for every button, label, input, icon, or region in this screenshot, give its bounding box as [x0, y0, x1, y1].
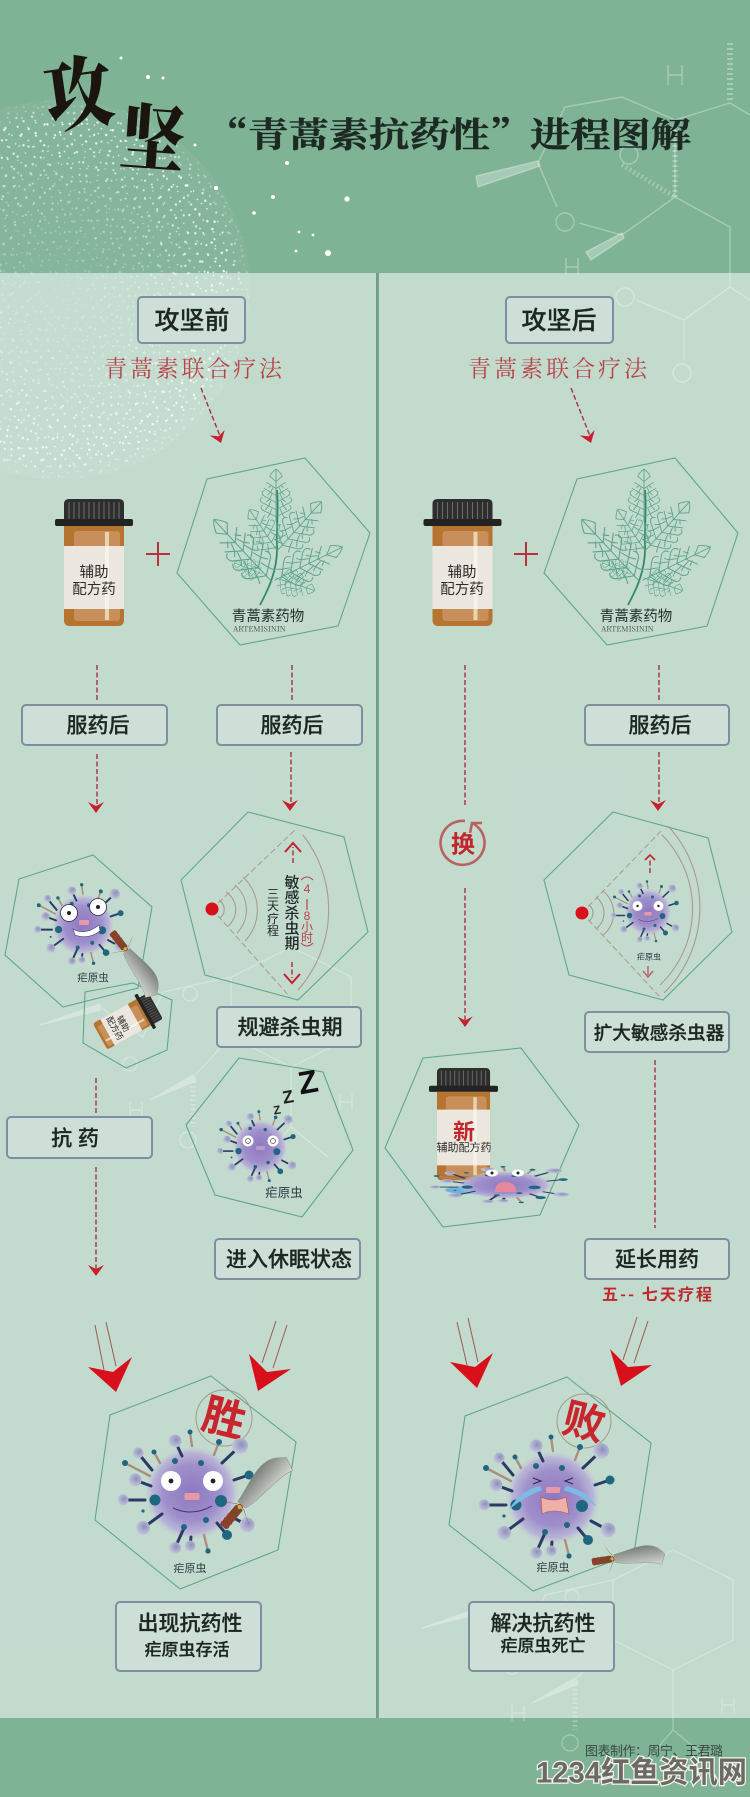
arrow: box to parasite col 1	[88, 754, 104, 813]
hexagon: dormant parasite: 疟原虫	[265, 1185, 303, 1200]
globe of dots	[0, 56, 350, 490]
icon: swap: 换	[451, 832, 475, 858]
footer credit: 图表制作：周宁、王君璐	[585, 1744, 723, 1758]
molecule watermarks	[40, 947, 734, 1762]
stamp: win: 胜	[197, 1391, 251, 1447]
box: dormancy: 进入休眠状态	[226, 1248, 352, 1272]
hexagon: grinning parasite: 疟原虫	[77, 971, 109, 984]
hexagon: enlarged radar: 疟原虫	[637, 952, 661, 962]
box: after taking right col: 服药后	[628, 714, 692, 738]
hexagon: parasite loses: 疟原虫	[536, 1560, 570, 1574]
box: extend	[585, 1239, 729, 1279]
hexagon: tilted bottle with knife: 辅助	[115, 1014, 132, 1034]
box: enlarge: 扩大敏感杀虫器	[594, 1022, 725, 1044]
hexagon: dormant parasite: Z	[295, 1063, 321, 1101]
hexagon: tilted bottle with knife	[83, 922, 172, 1068]
title: brush characters	[36, 28, 189, 189]
vertical text: hours: 48小时	[301, 882, 313, 945]
hexagon: dormant parasite: Z	[281, 1086, 295, 1108]
plus (after)	[514, 542, 538, 566]
icon: swap	[441, 821, 485, 865]
hexagon: new drug crushing parasite: 新	[453, 1120, 475, 1144]
hexagon: parasite loses	[449, 1377, 667, 1591]
heading: before: 攻坚前	[154, 307, 230, 335]
box: resistance solved: 疟原虫死亡	[500, 1636, 586, 1656]
box: extend: 延长用药	[615, 1248, 699, 1272]
divider	[376, 273, 378, 1718]
arrow: dash to swap	[464, 665, 466, 805]
box: after taking col 2	[217, 705, 362, 745]
hexagon: artemisinin plant (after)	[544, 458, 738, 645]
arrow: therapy to plant (before)	[201, 388, 229, 446]
hexagon: parasite wins	[95, 1376, 298, 1589]
box: after taking col 2: 服药后	[260, 714, 324, 738]
hexagon: new drug crushing parasite	[385, 1048, 579, 1227]
arrow: therapy to plant (after)	[571, 388, 599, 446]
arrows: bottom left panel	[88, 1321, 291, 1392]
box: after taking col 1	[22, 705, 167, 745]
vertical text: sensitive period: 敏感杀虫期	[284, 874, 300, 952]
hexagon: enlarged radar	[544, 812, 732, 1000]
box: resistance appears: 出现抗药性	[138, 1612, 242, 1636]
box: after taking right col	[585, 705, 729, 745]
arrow: dash to box right col	[658, 665, 660, 700]
bottle: partner drug (after): 配方药	[440, 581, 484, 598]
title: subtitle: “青蒿素抗药性”进程图解	[208, 107, 691, 157]
box: resistance appears	[116, 1602, 261, 1671]
box: evade: 规避杀虫期	[238, 1016, 342, 1040]
hexagon: artemisinin plant (before): ARTEMISININ	[233, 624, 286, 634]
arrow: dash to box col 1	[96, 665, 98, 700]
parasite	[118, 1430, 254, 1554]
bottle: partner drug (before): 配方药	[72, 581, 116, 598]
arrows: bottom right panel	[450, 1317, 652, 1388]
hexagon: dormant parasite	[186, 1058, 353, 1217]
box: dormancy	[215, 1239, 360, 1279]
subheading: before therapy: 青蒿素联合疗法	[104, 350, 283, 384]
heading: after: 攻坚后	[521, 307, 597, 335]
stamp: lose: 败	[558, 1394, 610, 1450]
arrow: dash to resistance	[95, 1078, 97, 1113]
bottle: partner drug (after): 辅助	[448, 564, 476, 581]
hexagon: new drug crushing parasite: 辅助配方药	[436, 1140, 492, 1154]
molecule: header right	[476, 43, 750, 382]
hexagon: grinning parasite	[5, 855, 152, 1007]
hexagon: artemisinin plant (before)	[177, 458, 370, 645]
arrow: enlarge to extend	[654, 1060, 656, 1228]
plus (before)	[146, 542, 170, 566]
text: five to seven days: 五-- 七天疗程	[602, 1281, 712, 1305]
box: resistance solved	[469, 1602, 614, 1671]
heading: after	[506, 297, 613, 343]
box: resistance appears: 疟原虫存活	[144, 1640, 230, 1660]
box: evade	[217, 1007, 361, 1047]
arrow: box to radar col 2	[282, 752, 298, 811]
panel: before	[0, 273, 376, 1718]
vertical text: three-day course: 三天疗程	[267, 887, 279, 938]
box: enlarge	[585, 1012, 729, 1052]
arrow: dash to box col 2	[291, 665, 293, 700]
bottle: partner drug (before)	[55, 499, 133, 626]
hexagon: artemisinin plant (after): ARTEMISININ	[601, 624, 654, 634]
arrow: resistance down	[88, 1167, 104, 1276]
watermark: 1234红鱼资讯网	[536, 1756, 747, 1790]
hexagon: artemisinin plant (after): 青蒿素药物	[600, 608, 672, 625]
box: resistance solved: 解决抗药性	[490, 1612, 596, 1636]
bottle: partner drug (before): 辅助	[80, 564, 108, 581]
parasite crying	[478, 1434, 616, 1559]
heading: before	[138, 297, 245, 343]
box: resistance	[7, 1117, 152, 1158]
arrow: swap to new drug	[457, 888, 473, 1027]
hexagon: dormant parasite: Z	[272, 1102, 282, 1118]
bottle: partner drug (after)	[424, 499, 502, 626]
hexagon: radar evade	[181, 812, 368, 1000]
hexagon: parasite wins: 疟原虫	[174, 1561, 206, 1575]
box: after taking col 1: 服药后	[66, 714, 130, 738]
title: brush characters: 攻	[36, 28, 120, 150]
arrow: box to radar right col	[650, 752, 666, 811]
box: resistance: 抗 药	[51, 1128, 99, 1150]
title: brush characters: 坚	[117, 79, 189, 189]
subheading: after therapy: 青蒿素联合疗法	[468, 350, 648, 384]
panel: after	[379, 273, 750, 1718]
hexagon: artemisinin plant (before): 青蒿素药物	[232, 608, 304, 625]
hexagon: tilted bottle with knife: 配方药	[104, 1015, 125, 1042]
title	[36, 28, 691, 189]
